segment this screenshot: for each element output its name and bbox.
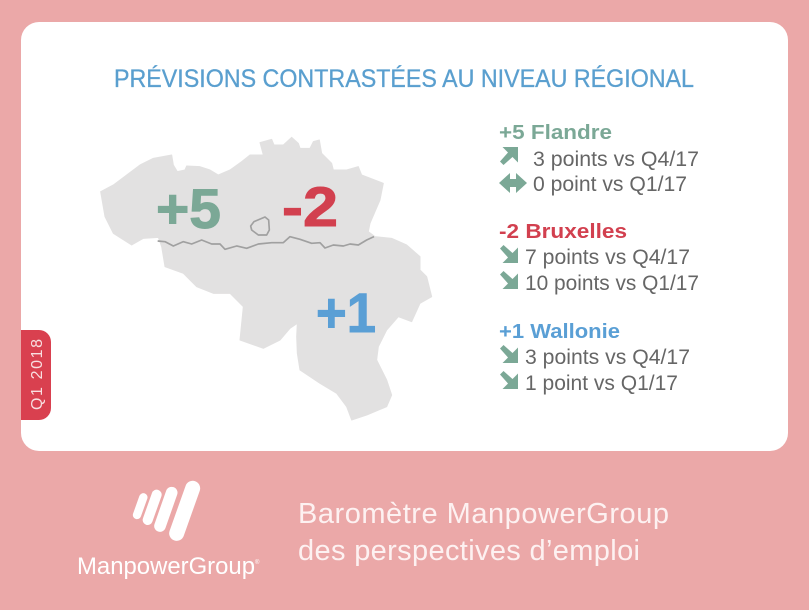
text: Bruxelles vs Q4/17: 7 points vs Q4/17 (525, 246, 690, 269)
heading: Bruxelles: -2 Bruxelles (499, 221, 627, 243)
map: country shape (101, 137, 432, 420)
map label: +1: +1 (316, 281, 376, 344)
tab: Q1 2018: Q1 2018 (29, 339, 46, 410)
title: PRÉVISIONS CONTRASTÉES AU NIVEAU RÉGIONAL (114, 64, 694, 93)
icon: arrow down right (500, 271, 518, 289)
map label: +5: +5 (156, 177, 221, 240)
map: regional border (158, 237, 374, 249)
footer text: des perspectives d’emploi (298, 535, 640, 567)
legend: Wallonie (499, 321, 690, 395)
legend: Flandre (499, 122, 699, 196)
text: Wallonie vs Q4/17: 3 points vs Q4/17 (525, 346, 690, 369)
text: Flandre vs Q4/17: 3 points vs Q4/17 (533, 148, 699, 171)
map of Belgium (101, 137, 432, 420)
tab: Q1 2018 (21, 330, 51, 420)
logo registered mark: ® (255, 559, 260, 566)
logo wordmark: ManpowerGroup (77, 553, 255, 580)
icon: double arrow (499, 173, 527, 193)
icon: logo bars (137, 488, 193, 533)
heading: Flandre: +5 Flandre (499, 122, 612, 144)
icon: arrow up right (500, 147, 518, 165)
icon: arrow down right (500, 345, 518, 363)
icon: arrow down right (500, 371, 518, 389)
footer text (298, 498, 669, 567)
icon: arrow down right (500, 245, 518, 263)
map label: -2: -2 (282, 175, 338, 238)
text: Bruxelles vs Q1/17: 10 points vs Q1/17 (525, 272, 699, 295)
legend: Bruxelles (499, 221, 699, 295)
logo: ManpowerGroup (77, 488, 260, 580)
map: Brussels outline (251, 217, 269, 235)
footer text: Baromètre ManpowerGroup (298, 498, 669, 530)
text: Flandre vs Q1/17: 0 point vs Q1/17 (533, 173, 687, 196)
text: Wallonie vs Q1/17: 1 point vs Q1/17 (525, 372, 678, 395)
panel: white card (21, 22, 788, 451)
heading: Wallonie: +1 Wallonie (499, 321, 620, 343)
